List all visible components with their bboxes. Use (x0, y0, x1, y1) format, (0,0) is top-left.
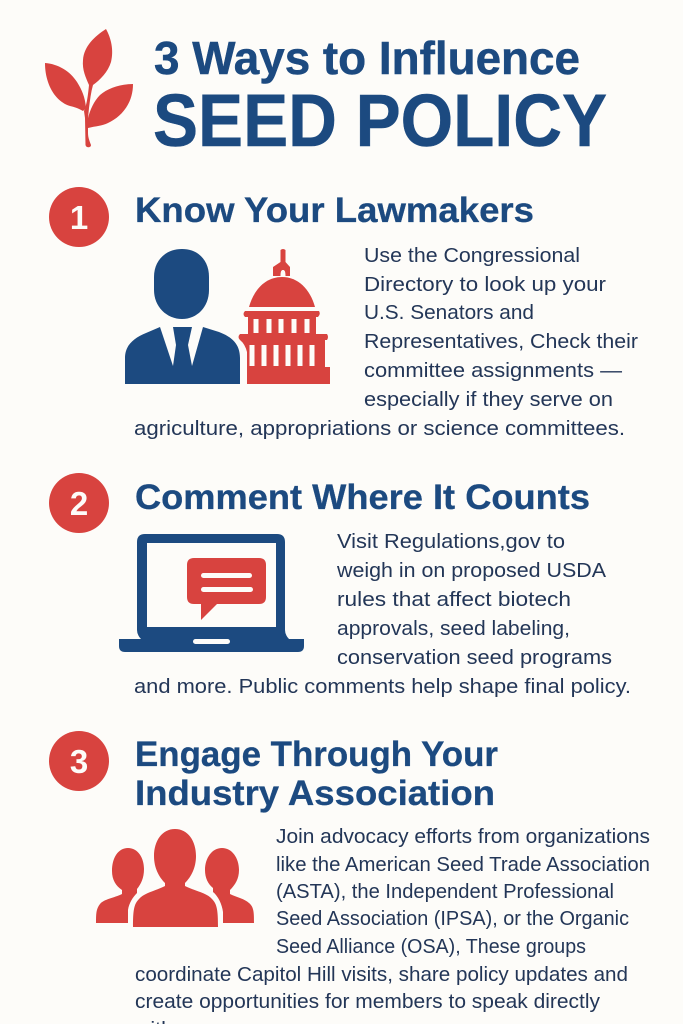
text block: step 3 body: coordinate Capitol Hill visits, share policy updates and (135, 963, 628, 986)
text block: step 1 body: Directory to look up your (364, 273, 606, 296)
number badge 3 (49, 731, 109, 791)
heading: Engage Through Your Industry Association: Engage Through Your (135, 735, 498, 774)
text block: step 1 body (134, 244, 638, 440)
text block: step 2 body (134, 530, 631, 698)
text block: step 2 body: conservation seed programs (337, 646, 612, 669)
icon: red seedling logo (45, 29, 133, 147)
text block: step 1 body: agriculture, appropriations or science committees. (134, 417, 625, 440)
text block: step 3 body: Seed Alliance (OSA), These groups (276, 935, 586, 958)
text block: step 2 body: and more. Public comments help shape final policy. (134, 675, 631, 698)
text block: step 1 body: U.S. Senators and (364, 301, 534, 324)
text block: step 1 body: Representatives, Check their (364, 330, 638, 353)
number badge 3: 3 (70, 743, 88, 780)
heading: Know Your Lawmakers: Know Your Lawmakers (135, 191, 534, 230)
heading: Comment Where It Counts: Comment Where It Counts (135, 478, 590, 517)
text block: step 1 body: especially if they serve on (364, 388, 613, 411)
heading: Engage Through Your Industry Association: Industry Association (135, 774, 495, 813)
number badge 2: 2 (70, 485, 88, 522)
icon: person in suit (125, 249, 240, 384)
panel: step 2 (49, 473, 631, 698)
icon: capitol building (238, 249, 330, 384)
text block: step 3 body (134, 825, 650, 1024)
text block: step 2 body: approvals, seed labeling, (337, 617, 570, 640)
text block: step 3 body: Seed Association (IPSA), or the Organic (276, 907, 629, 930)
text block: step 2 body: Visit Regulations,gov to (337, 530, 565, 553)
panel: step 1 (49, 187, 638, 440)
text block: step 3 body: like the American Seed Trade Association (276, 853, 650, 876)
icon: laptop with speech bubble (119, 534, 304, 652)
number badge 1 (49, 187, 109, 247)
text block: step 3 body: Join advocacy efforts from organizations (276, 825, 650, 848)
title: 3 Ways to Influence (154, 32, 580, 84)
number badge 2 (49, 473, 109, 533)
text block: step 1 body: committee assignments — (364, 359, 623, 382)
number badge 1: 1 (70, 199, 88, 236)
panel: step 3 (49, 731, 650, 1024)
text block: step 3 body: (ASTA), the Independent Professional (276, 880, 614, 903)
text block: step 2 body: rules that affect biotech (337, 588, 571, 611)
text block: step 2 body: weigh in on proposed USDA (336, 559, 606, 582)
title (153, 32, 607, 162)
text block: step 1 body: Use the Congressional (364, 244, 580, 267)
title: SEED POLICY (153, 79, 607, 162)
heading: Engage Through Your Industry Association (135, 735, 498, 813)
text block: step 3 body: create opportunities for members to speak directly (135, 990, 601, 1013)
icon: group of three people (96, 829, 254, 927)
